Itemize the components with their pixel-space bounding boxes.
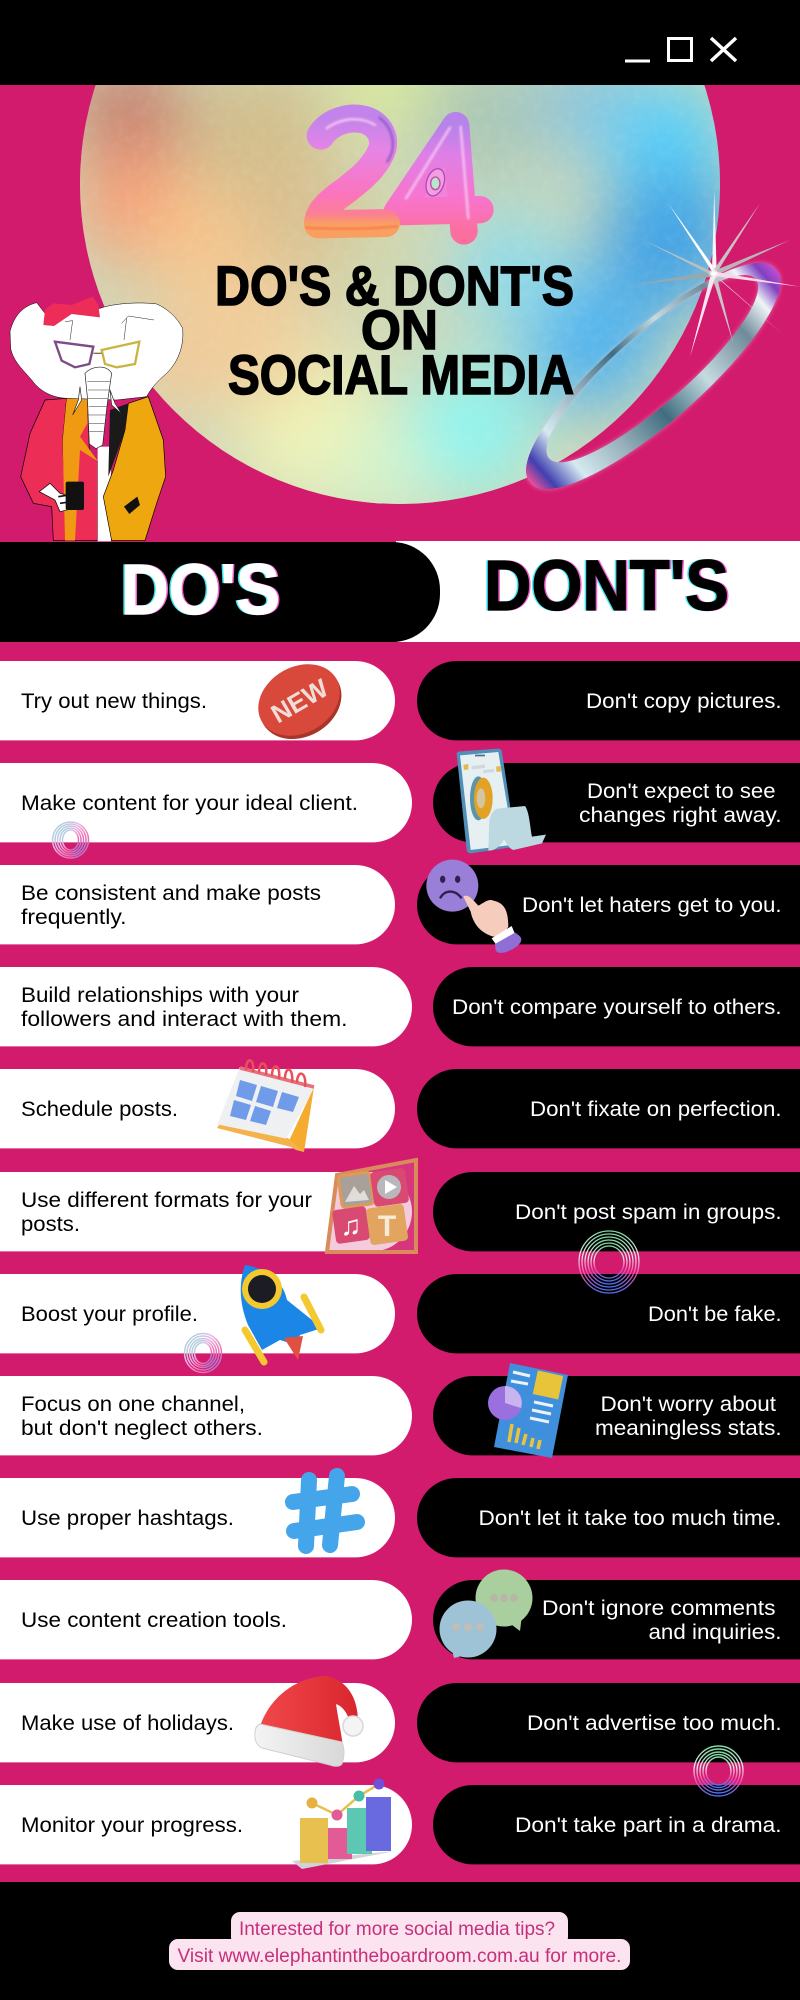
- ring: [526, 263, 781, 489]
- do 6: posts.: [21, 1212, 80, 1236]
- dont 3: [417, 865, 800, 944]
- dont 1: Don't copy pictures.: [586, 689, 782, 713]
- icon: content formats: ♫: [340, 1210, 362, 1241]
- icon: new badge: [245, 650, 355, 754]
- elephant body and jacket: [21, 393, 166, 541]
- footer band: [0, 1882, 800, 2000]
- hand and phone: [39, 482, 84, 512]
- decorative swirl 2: [579, 1231, 639, 1293]
- heading: dont's: DONT'S: [482, 547, 728, 626]
- bow: [43, 297, 100, 326]
- dont 1: [417, 661, 800, 740]
- dont 2: changes right away.: [579, 803, 782, 827]
- dont 8: [433, 1376, 800, 1455]
- dont 12: Don't take part in a drama.: [515, 1813, 782, 1837]
- glasses: [55, 342, 139, 367]
- dont 11: Don't advertise too much.: [527, 1711, 782, 1735]
- top black window bar: [0, 0, 800, 85]
- do 4: [0, 967, 412, 1046]
- do 3: Be consistent and make posts: [21, 881, 321, 905]
- dont 6: Don't post spam in groups.: [515, 1200, 782, 1224]
- dont 5: Don't fixate on perfection.: [530, 1097, 782, 1121]
- icon: phone with receipt: [457, 749, 546, 853]
- dont 5: [417, 1069, 800, 1148]
- dont 11: [417, 1683, 800, 1762]
- icon: chat bubbles: [440, 1570, 532, 1658]
- do 7: Boost your profile.: [21, 1302, 198, 1326]
- do 1: [0, 661, 395, 740]
- hero iridescent circle: [80, 85, 720, 504]
- do's header bar: [0, 541, 800, 642]
- dont 8: meaningless stats.: [595, 1416, 782, 1440]
- do 12: [0, 1785, 412, 1864]
- do 8: Focus on one channel,: [21, 1392, 245, 1416]
- do 9: [0, 1478, 395, 1557]
- title: do's and dont's on social media: DO'S & DONT'S: [215, 254, 574, 317]
- icon: maximise window: [668, 38, 692, 60]
- heading: do's: DO'S: [120, 551, 278, 630]
- number 24 in balloon style: [307, 118, 480, 231]
- decorative swirl 1: [52, 822, 88, 858]
- icon: santa hat: [255, 1676, 363, 1766]
- do 5: Schedule posts.: [21, 1097, 178, 1121]
- star sparkle: [632, 190, 800, 357]
- do 11: [0, 1683, 395, 1762]
- panel: do's list: [0, 661, 412, 1864]
- footer callout: [169, 1912, 630, 1970]
- dont 2: [433, 763, 800, 842]
- dont 8: Don't worry about: [600, 1392, 776, 1416]
- dont 12: [433, 1785, 800, 1864]
- do 3: [0, 865, 395, 944]
- dont 10: Don't ignore comments: [542, 1596, 776, 1620]
- dont 7: [417, 1274, 800, 1353]
- head and ears: [10, 303, 183, 400]
- do 11: Make use of holidays.: [21, 1711, 234, 1735]
- dont 2: Don't expect to see: [587, 779, 776, 803]
- ring with star sparkle: [526, 190, 800, 489]
- title: do's and dont's on social media: ON: [361, 298, 438, 361]
- black do's pill: [0, 542, 440, 642]
- heading: do's: DO'S: [122, 551, 282, 630]
- dont 9: [417, 1478, 800, 1557]
- face line details: [65, 316, 154, 340]
- do 6: [0, 1172, 412, 1251]
- icon: content formats: [327, 1160, 416, 1252]
- dont 6: [433, 1172, 800, 1251]
- do 7: [0, 1274, 395, 1353]
- footer callout: Visit www.elephantintheboardroom.com.au for more.: [178, 1946, 622, 1967]
- do 2: Make content for your ideal client.: [21, 791, 358, 815]
- title: do's and dont's on social media: SOCIAL MEDIA: [228, 343, 574, 406]
- icon: minimise window: [625, 60, 650, 62]
- icon: report with charts: [488, 1363, 568, 1458]
- trunk: [85, 367, 112, 449]
- dont 4: Don't compare yourself to others.: [452, 995, 782, 1019]
- icon: calendar: [217, 1060, 314, 1152]
- dont 10: [433, 1580, 800, 1659]
- do 3: frequently.: [21, 905, 126, 929]
- white dont's band: [396, 541, 800, 642]
- decorative swirl 4: [694, 1746, 743, 1796]
- do 2: [0, 763, 412, 842]
- icon: bar chart growth: [292, 1778, 395, 1869]
- icon: new badge: NEW: [266, 672, 334, 729]
- ring glow: [526, 263, 781, 489]
- icon: content formats: T: [378, 1210, 396, 1243]
- do 6: Use different formats for your: [21, 1188, 312, 1212]
- icon: close window: [711, 38, 736, 61]
- footer callout: Interested for more social media tips?: [239, 1919, 555, 1940]
- do 8: [0, 1376, 412, 1455]
- heading: dont's: DONT'S: [484, 547, 729, 626]
- dont 9: Don't let it take too much time.: [478, 1506, 782, 1530]
- do 5: [0, 1069, 395, 1148]
- do 8: but don't neglect others.: [21, 1416, 263, 1440]
- digit 2: [307, 118, 397, 229]
- elephant mascot illustration: [10, 297, 183, 541]
- do 12: Monitor your progress.: [21, 1813, 243, 1837]
- do 10: [0, 1580, 412, 1659]
- panel: dont's list: [417, 661, 800, 1864]
- tusks: [73, 387, 122, 415]
- heading: do's: DO'S: [121, 551, 280, 630]
- decorative swirl 3: [184, 1334, 222, 1372]
- icon: rocket: [241, 1265, 322, 1362]
- heading: dont's: DONT'S: [486, 547, 730, 626]
- dont 10: and inquiries.: [648, 1620, 782, 1644]
- do 10: Use content creation tools.: [21, 1608, 287, 1632]
- do 1: Try out new things.: [21, 689, 207, 713]
- dont 7: Don't be fake.: [648, 1302, 782, 1326]
- do 4: followers and interact with them.: [21, 1007, 348, 1031]
- do 4: Build relationships with your: [21, 983, 299, 1007]
- dont 3: Don't let haters get to you.: [522, 893, 782, 917]
- do 9: Use proper hashtags.: [21, 1506, 234, 1530]
- digit 4: [397, 125, 480, 231]
- title: do's and dont's on social media: [215, 254, 574, 406]
- icon: sad face with pointing hand: [426, 860, 521, 953]
- dont 4: [433, 967, 800, 1046]
- icon: hashtag: [293, 1476, 357, 1546]
